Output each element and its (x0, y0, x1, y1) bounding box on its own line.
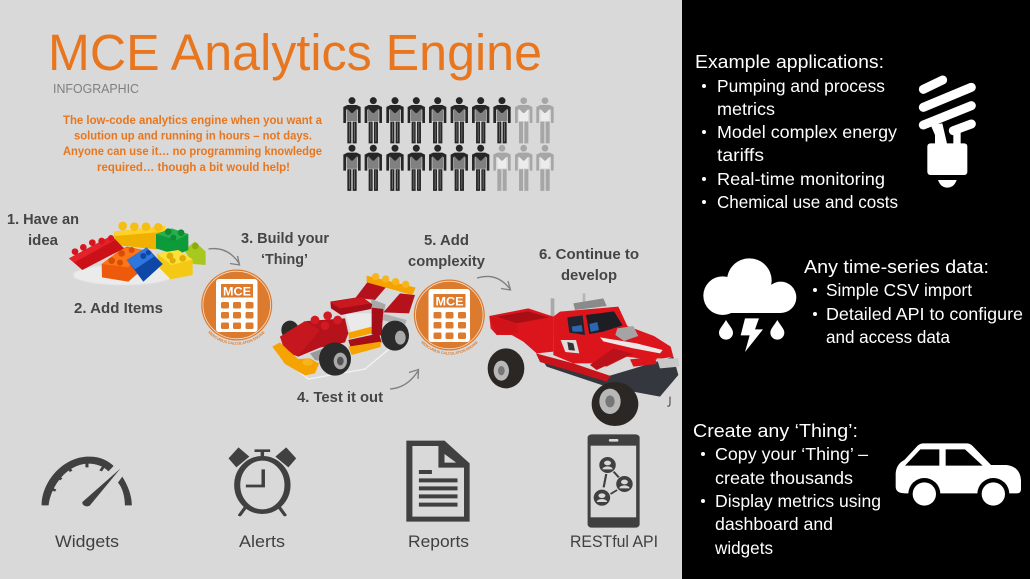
arrow: to step 3 (208, 249, 240, 265)
MCE calculator badge: MCE (223, 284, 251, 298)
lego truck (488, 293, 679, 426)
icon: report document (406, 441, 470, 522)
label: Reports: Reports (408, 532, 469, 551)
pictogram of people (343, 97, 554, 191)
step 6 label: 6. Continue to (539, 247, 639, 263)
text block: example applications: metrics (717, 99, 775, 119)
text block: example applications: tariffs (717, 145, 764, 165)
text block: create any thing: widgets (714, 538, 773, 558)
icon: phone with network (588, 434, 640, 528)
text block: any time-series data: Any time-series data: (804, 256, 989, 277)
icon: light bulb (923, 80, 971, 188)
text block: example applications: Pumping and process (717, 76, 885, 96)
text block: example applications: Example applications: (695, 51, 884, 72)
icon: alarm clock (229, 447, 296, 515)
text block: any time-series data (804, 256, 1023, 347)
text block: example applications: Real-time monitoring (717, 169, 885, 189)
step 3 label: 3. Build your (241, 231, 329, 247)
MCE calculator badge: MERCURIUS CALCULATION ENGINE (208, 330, 265, 345)
title: MCE Analytics Engine (48, 24, 542, 81)
step 5 label: complexity (408, 254, 485, 270)
intro text: solution up and running in hours – not days. (74, 128, 312, 142)
arrow: to step 5 (390, 370, 418, 389)
step 4 label: 4. Test it out (297, 390, 383, 406)
text block: any time-series data: Simple CSV import (826, 280, 972, 300)
step 1 label: 1. Have an (7, 212, 79, 228)
background panel (0, 0, 682, 579)
text block: create any thing: Create any ‘Thing’: (693, 420, 858, 441)
black side panel (682, 0, 1030, 579)
text block: example applications: Model complex energy (717, 122, 897, 142)
step 3 label (241, 231, 329, 268)
label: Alerts: Alerts (239, 532, 285, 551)
step 6 label (539, 247, 639, 284)
lego bricks pile (69, 222, 206, 285)
step 5 label: 5. Add (424, 233, 469, 249)
icon: storm cloud (703, 258, 796, 352)
label: RESTful API: RESTful API (570, 532, 658, 551)
intro text: Anyone can use it… no programming knowledge (63, 144, 322, 158)
text block: create any thing (693, 420, 881, 558)
label: Widgets: Widgets (55, 532, 119, 551)
step 2 label: 2. Add Items (74, 301, 163, 317)
step 3 label: ‘Thing’ (261, 252, 308, 268)
subtitle: INFOGRAPHIC (53, 82, 139, 96)
MCE calculator badge: MERCURIUS CALCULATION ENGINE (421, 340, 478, 355)
icon: car (896, 443, 1021, 510)
intro text: required… though a bit would help! (97, 160, 290, 174)
intro text: The low-code analytics engine when you want a (63, 113, 322, 127)
MCE calculator badge (414, 280, 485, 355)
arrow: to step 6 (477, 276, 510, 290)
lego race car (272, 273, 416, 379)
intro text (63, 113, 322, 174)
text block: any time-series data: and access data (826, 327, 950, 347)
step 1 label: idea (28, 233, 59, 249)
step 5 label (408, 233, 485, 270)
text block: example applications: Chemical use and costs (717, 192, 898, 212)
text block: create any thing: dashboard and (715, 514, 833, 534)
text block: create any thing: Display metrics using (715, 491, 881, 511)
MCE calculator badge: MCE (436, 294, 464, 308)
step 1 label (7, 212, 79, 249)
MCE calculator badge (201, 270, 272, 345)
text block: create any thing: Copy your ‘Thing’ – (715, 444, 868, 464)
step 6 label: develop (561, 268, 617, 284)
text block: create any thing: create thousands (715, 468, 853, 488)
text block: any time-series data: Detailed API to configure (826, 304, 1023, 324)
text block: example applications (695, 51, 898, 212)
icon: gauge (42, 457, 132, 506)
